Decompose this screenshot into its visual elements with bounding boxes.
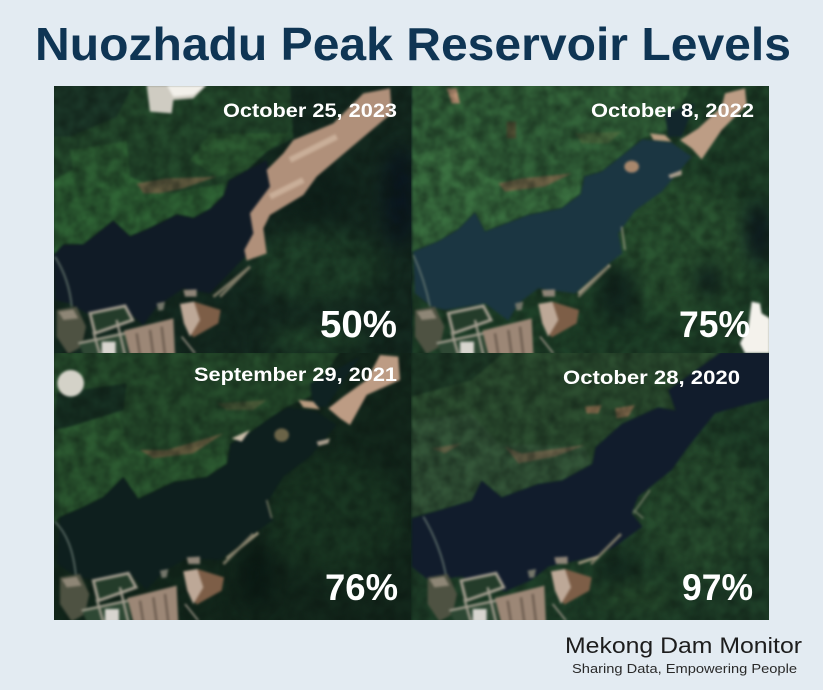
panel: October 25, 2023 satellite image	[50, 80, 420, 360]
exposed sand	[680, 88, 747, 159]
reservoir level: 76%	[325, 567, 398, 608]
title: Nuozhadu Peak Reservoir Levels	[35, 18, 791, 70]
reservoir level: 97%	[682, 567, 753, 608]
access road	[423, 517, 447, 580]
water	[412, 352, 772, 592]
water	[413, 139, 692, 321]
upper land	[408, 85, 692, 257]
exposed sand	[328, 355, 400, 425]
reservoir level: 75%	[679, 304, 750, 345]
land texture	[405, 80, 775, 360]
water	[54, 160, 272, 325]
access road	[413, 255, 430, 307]
access road	[55, 257, 72, 307]
upper land	[412, 353, 717, 458]
land texture	[405, 350, 775, 630]
access road	[55, 522, 76, 577]
cloud	[147, 85, 207, 113]
cloud	[57, 370, 84, 397]
upper land	[54, 86, 294, 194]
date label: September 29, 2021	[194, 364, 397, 386]
panel: September 29, 2021 satellite image	[50, 350, 420, 630]
land texture	[50, 350, 420, 630]
cloud	[740, 302, 770, 353]
exposed sand	[244, 88, 392, 261]
panel: October 28, 2020 satellite image	[405, 350, 775, 630]
date label: October 28, 2020	[563, 367, 740, 389]
land texture	[50, 80, 420, 360]
date label: October 8, 2022	[591, 100, 754, 122]
credit: organisation name: Mekong Dam Monitor	[565, 633, 803, 658]
credit: tagline: Sharing Data, Empowering People	[572, 661, 797, 676]
water	[60, 412, 310, 577]
date label: October 25, 2023	[223, 100, 397, 122]
reservoir level: 50%	[320, 304, 397, 346]
panel: October 8, 2022 satellite image	[405, 80, 775, 360]
upper land	[53, 352, 340, 523]
